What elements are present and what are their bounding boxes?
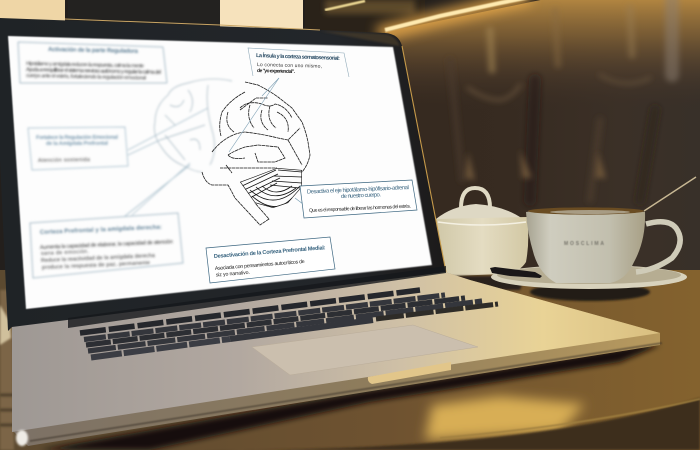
- panel: bottom left callout: [30, 213, 183, 278]
- saucer, cup and spoon: [490, 177, 696, 301]
- background wall: [0, 0, 700, 300]
- panel: bottom left callout: Aumenta la capacidad de elaborar, la capacidad de atención: [40, 239, 173, 251]
- callout: insula: de "yo experiencial".: [257, 68, 296, 75]
- callout: hypothalamic axis: [300, 180, 417, 218]
- callout: hypothalamic axis: Que es el responsable de liberar las hormonas del estrés.: [309, 204, 411, 214]
- panel: middle left callout: Atención sostenida: [38, 157, 91, 164]
- panel: top left callout: Ayuda a reequilibrar el sistema nervioso autónomo y regular la calma del: [26, 67, 161, 76]
- leader lines: [125, 108, 208, 216]
- callout: medial prefrontal cortex: Desactivación de la Corteza Prefrontal Medial:: [214, 245, 326, 260]
- panel: top left callout: Hipotálamo y amígdala reducen la respuesta, calma la mente: [26, 61, 144, 69]
- panel: top left callout: Activación de la parte Reguladora: [48, 47, 139, 55]
- wood panel: [385, 0, 700, 290]
- callout: insula: La Ínsula y la corteza somatosensorial:: [256, 51, 340, 62]
- cup logo: MOSCLIMA: [564, 241, 604, 247]
- callout: insula: [248, 48, 349, 77]
- panel: middle left callout: [28, 127, 128, 170]
- panel: blurred callouts: [18, 42, 232, 278]
- table: [0, 270, 700, 450]
- panel: middle left callout: Fortalece la Regulación Emocional: [36, 135, 118, 141]
- laptop lid: [0, 18, 446, 331]
- callout: medial prefrontal cortex: [206, 237, 335, 283]
- keyboard: [80, 290, 498, 358]
- panel: bottom left callout: produce la respuesta de paz, permanente: [42, 260, 150, 271]
- panel: middle left callout: de la Amígdala Prefrontal: [46, 141, 108, 147]
- light strip: [325, 0, 530, 34]
- callout: hypothalamic axis: Desactiva el eje hipotálamo-hipófisario-adrenal: [307, 185, 409, 195]
- laptop base: [12, 272, 662, 446]
- callout: hypothalamic axis: de nuestro cuerpo.: [341, 192, 381, 200]
- panel: bottom left callout: Reduce la reactividad de la amígdala derecha: [41, 253, 156, 264]
- callout: medial prefrontal cortex: Asociada con pensamientos autocríticos de: [215, 259, 305, 272]
- panel: bottom left callout: sana de emoción.: [41, 249, 90, 257]
- panel: bottom left callout: Corteza Prefrontal y la amígdala derecha:: [40, 225, 162, 236]
- sugar bowl: [436, 188, 528, 290]
- latch: [368, 362, 451, 384]
- callout: insula: Lo conecta con uno mismo,: [257, 62, 322, 70]
- callout: medial prefrontal cortex: siz yo narrativo.: [216, 270, 250, 278]
- brain left half: [154, 79, 232, 172]
- panel: top left callout: cuerpo ante el estrés, fortaleciendo la regulación emocional: [26, 73, 146, 82]
- brain right: [202, 82, 310, 225]
- panel: top left callout: [18, 42, 167, 83]
- trackpad: [252, 325, 478, 375]
- corner highlight: [16, 430, 28, 446]
- screen: [8, 36, 432, 309]
- cerebellum: [240, 168, 302, 208]
